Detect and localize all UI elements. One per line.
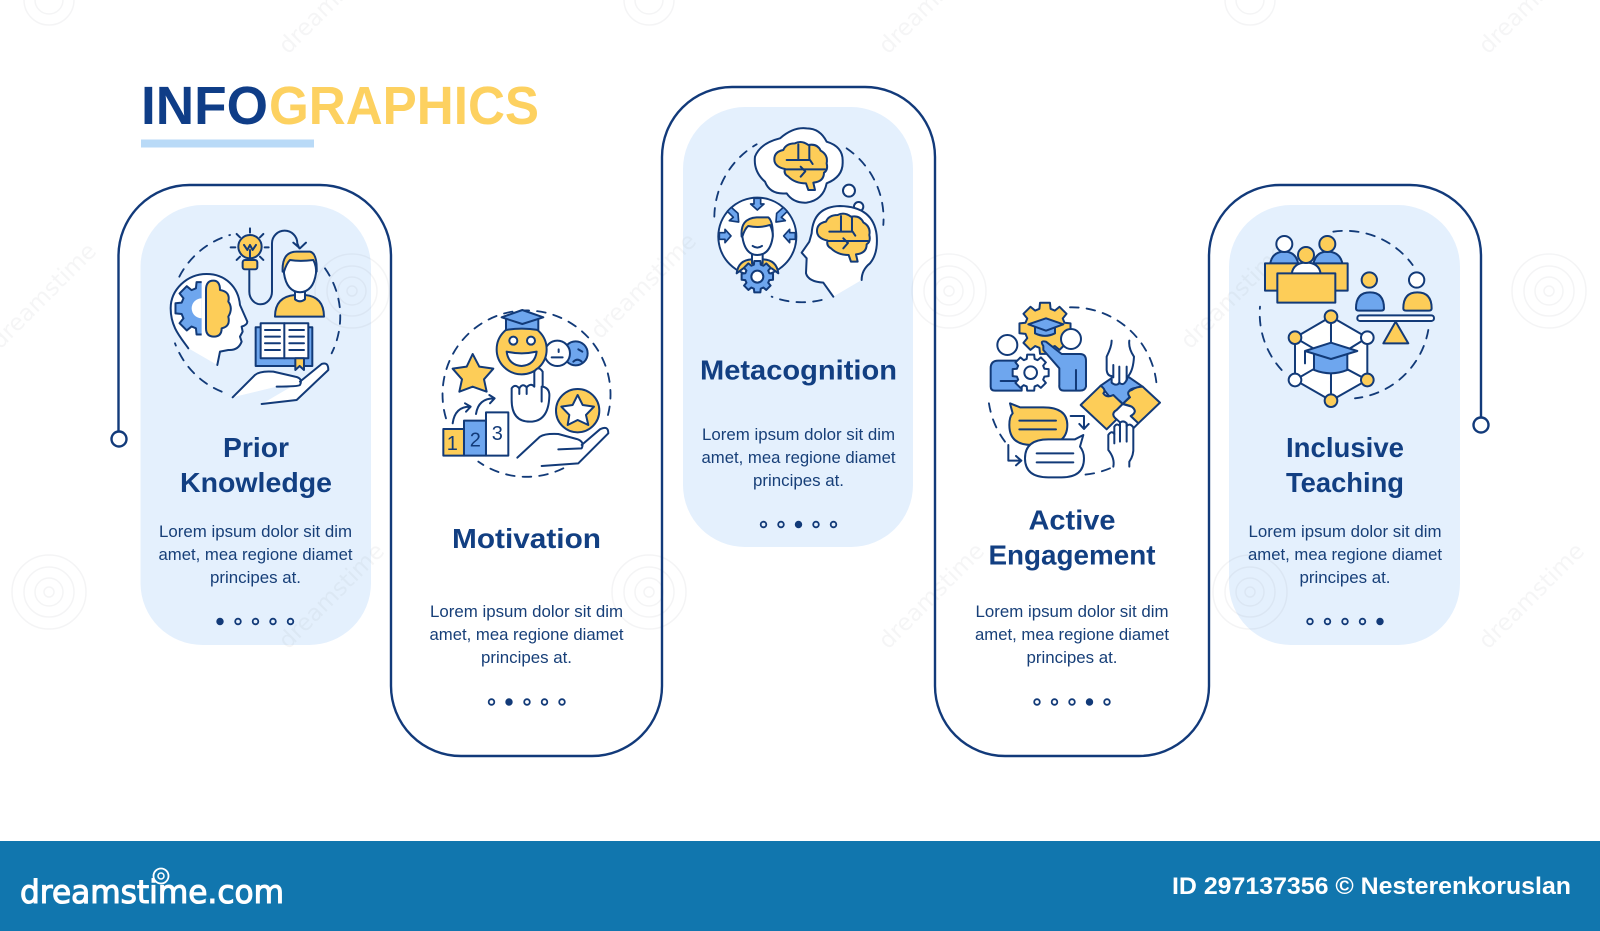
panel: motivation	[430, 310, 624, 705]
text block: principes at.	[753, 472, 844, 490]
pagination dots	[1307, 619, 1383, 624]
connecting outline	[112, 87, 1488, 756]
text block: amet, mea regione diamet	[975, 626, 1169, 644]
text block	[702, 426, 896, 490]
text block: principes at.	[481, 649, 572, 667]
text block	[975, 603, 1169, 667]
text block	[158, 523, 353, 587]
heading: Metacognition	[700, 354, 897, 386]
watermark: dreamstime	[1474, 538, 1590, 654]
text block: amet, mea regione diamet	[158, 546, 353, 564]
text block	[430, 603, 624, 667]
pagination dots	[761, 522, 836, 527]
text block: amet, mea regione diamet	[1248, 546, 1442, 564]
heading: Knowledge	[180, 467, 332, 498]
text block: Lorem ipsum dolor sit dim	[159, 523, 352, 541]
text block: principes at.	[1300, 569, 1390, 587]
text block: principes at.	[1026, 649, 1118, 667]
text block: amet, mea regione diamet	[430, 626, 624, 644]
icon: smile, stars, podium, hand	[443, 310, 611, 477]
panel: inclusive teaching background	[1229, 205, 1460, 645]
panel: metacognition	[700, 128, 897, 527]
image id and author: ID 297137356 © Nesterenkoruslan	[1172, 873, 1571, 900]
icon: classroom, balance, graduation network	[1260, 231, 1434, 407]
watermark	[0, 0, 1590, 654]
heading: Motivation	[452, 523, 601, 554]
icon: people, gears, puzzle, speech bubbles	[988, 303, 1160, 477]
panel: prior knowledge background	[140, 205, 371, 645]
panel: metacognition background	[683, 107, 913, 547]
panel: prior knowledge	[158, 228, 353, 624]
icon: smile, stars, podium, hand: 2	[470, 430, 481, 452]
title: GRAPHICS	[269, 76, 539, 136]
text block: principes at.	[210, 569, 301, 587]
heading: Inclusive	[1286, 432, 1404, 463]
icon: cloud brain, person with arrows, head with brain	[714, 128, 884, 302]
watermark: dreamstime	[274, 538, 390, 654]
text block: Lorem ipsum dolor sit dim	[430, 603, 623, 621]
pagination dots	[489, 699, 565, 705]
panel: inclusive teaching	[1248, 231, 1442, 624]
heading	[1286, 432, 1404, 498]
title: INFO	[141, 76, 268, 136]
text block: Lorem ipsum dolor sit dim	[702, 426, 895, 444]
text block: Lorem ipsum dolor sit dim	[976, 603, 1168, 621]
text block: amet, mea regione diamet	[702, 449, 896, 467]
panel: active engagement	[975, 303, 1169, 705]
footer banner	[0, 841, 1600, 931]
heading: Prior	[223, 432, 289, 463]
title	[141, 76, 539, 148]
logo: dreamstime.com	[20, 873, 284, 911]
heading	[180, 432, 332, 498]
icon: smile, stars, podium, hand: 3	[492, 423, 503, 445]
text block	[1248, 523, 1442, 587]
heading: Teaching	[1286, 467, 1404, 498]
text block: Lorem ipsum dolor sit dim	[1248, 523, 1442, 541]
icon: head, bulb, person, book	[171, 228, 340, 404]
watermark: dreamstime	[1176, 238, 1292, 354]
watermark: dreamstime	[874, 538, 990, 654]
pagination dots	[1034, 699, 1110, 705]
heading: Engagement	[988, 540, 1156, 570]
heading: Active	[1028, 504, 1116, 536]
pagination dots	[217, 619, 293, 624]
icon: smile, stars, podium, hand: 1	[447, 433, 458, 455]
watermark: dreamstime	[586, 228, 702, 344]
heading	[988, 504, 1156, 570]
